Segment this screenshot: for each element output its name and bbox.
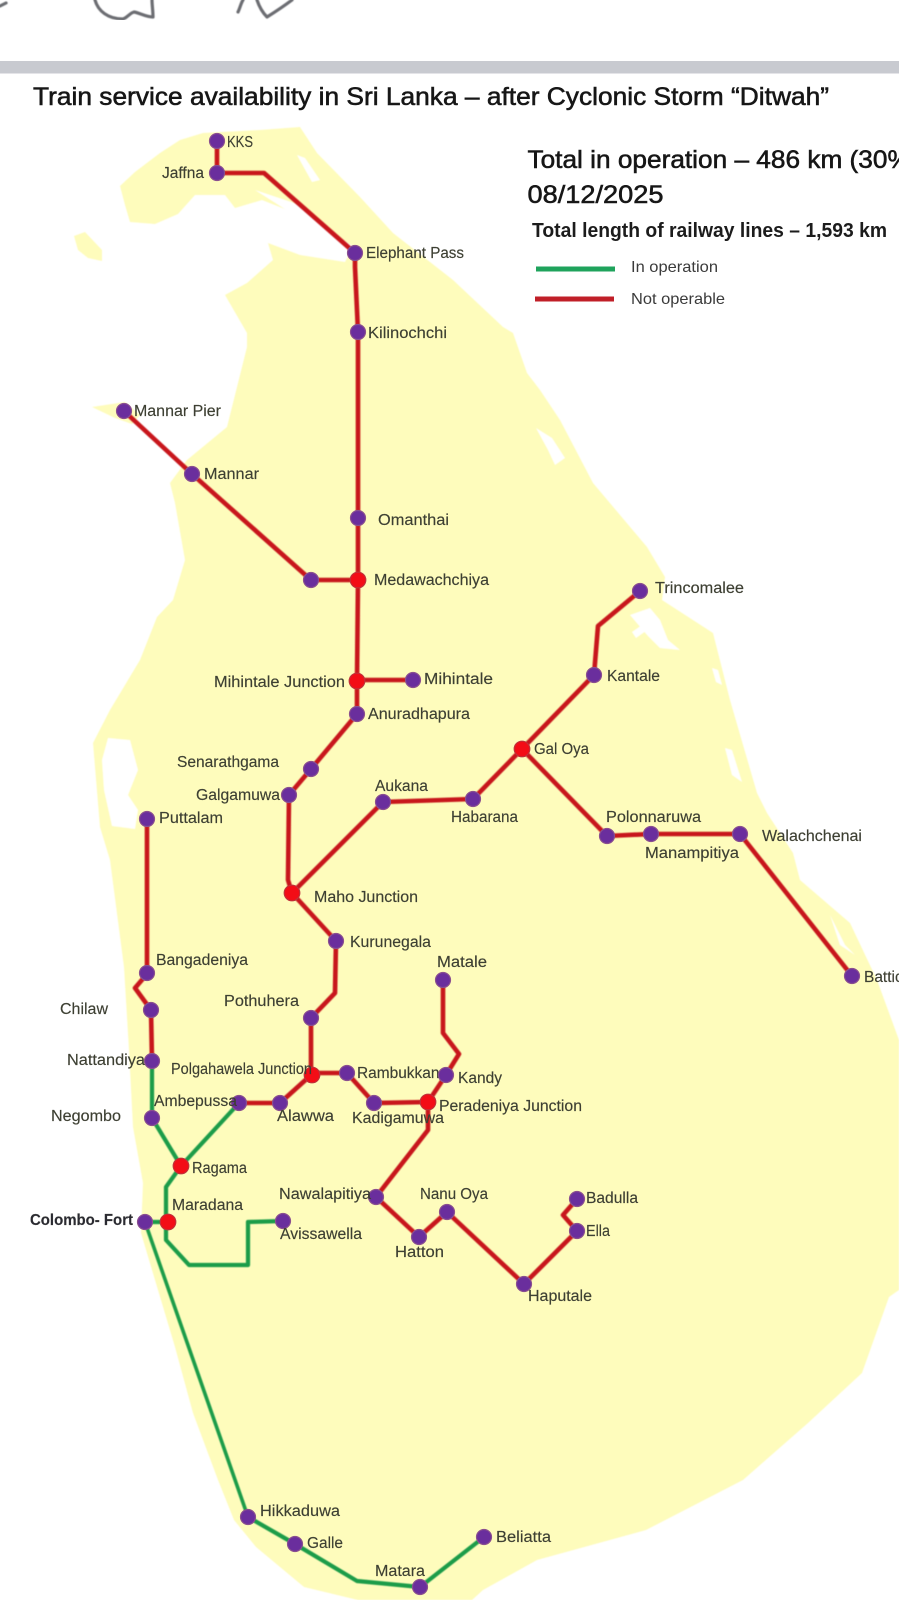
station: Manampitiya: Manampitiya bbox=[645, 845, 739, 862]
station: Matale: Matale bbox=[437, 954, 487, 971]
legend: in operation bbox=[536, 259, 718, 276]
station: Aukana: Aukana bbox=[375, 778, 428, 795]
station: Beliatta bbox=[476, 1529, 551, 1546]
station: Maradana bbox=[160, 1197, 243, 1230]
station: Avissawella: Avissawella bbox=[280, 1226, 362, 1243]
station: Galgamuwa: Galgamuwa bbox=[196, 787, 280, 804]
station: Mannar Pier: Mannar Pier bbox=[134, 403, 221, 420]
station: Matale bbox=[436, 954, 487, 988]
station: Chilaw: Chilaw bbox=[60, 1001, 109, 1018]
station: Hikkaduwa: Hikkaduwa bbox=[260, 1503, 340, 1520]
station: Elephant Pass: Elephant Pass bbox=[366, 245, 464, 262]
station: Habarana bbox=[451, 792, 518, 826]
station: Polonnaruwa: Polonnaruwa bbox=[606, 809, 701, 826]
station: Medawachchiya: Medawachchiya bbox=[374, 572, 489, 589]
station: Maradana: Maradana bbox=[172, 1197, 243, 1214]
station: Rambukkana: Rambukkana bbox=[357, 1065, 448, 1082]
station: Ambepussa: Ambepussa bbox=[154, 1093, 237, 1110]
station: Alawwa bbox=[272, 1096, 334, 1125]
cropped sketch icons at top bbox=[0, 0, 292, 19]
Mannar island bbox=[92, 402, 140, 424]
station: Kadigamuwa bbox=[352, 1096, 444, 1127]
station: Ragama bbox=[173, 1158, 247, 1177]
station: Badulla: Badulla bbox=[586, 1190, 638, 1207]
summary: total in operation: Total in operation – 486 km (30%) bbox=[528, 146, 899, 174]
station: Jaffna: Jaffna bbox=[162, 165, 204, 182]
station: Jaffna bbox=[162, 165, 224, 182]
station: Aukana bbox=[375, 778, 428, 810]
station: Chilaw bbox=[60, 1001, 158, 1018]
legend bbox=[535, 259, 725, 308]
station: Ella: Ella bbox=[586, 1223, 610, 1240]
station: Manampitiya bbox=[644, 826, 739, 862]
title: Train service availability in Sri Lanka – after Cyclonic Storm “Ditwah” bbox=[33, 83, 829, 111]
station: KKS bbox=[210, 134, 253, 151]
summary: total length: Total length of railway lines – 1,593 km bbox=[532, 220, 887, 242]
station: Kurunegala: Kurunegala bbox=[350, 934, 431, 951]
station: Kandy bbox=[438, 1068, 502, 1087]
station: Maho Junction: Maho Junction bbox=[314, 889, 418, 906]
station: Ragama: Ragama bbox=[192, 1160, 247, 1177]
station: Gal Oya: Gal Oya bbox=[534, 741, 589, 758]
station: Omanthai bbox=[350, 510, 449, 529]
railway lines: in operation bbox=[145, 1061, 484, 1587]
station: Omanthai: Omanthai bbox=[378, 512, 449, 529]
station: Kadigamuwa: Kadigamuwa bbox=[352, 1110, 444, 1127]
station: unnamed bbox=[304, 572, 318, 588]
station: Pothuhera: Pothuhera bbox=[224, 993, 299, 1010]
legend: not operable bbox=[535, 291, 725, 308]
station: Trincomalee: Trincomalee bbox=[655, 580, 744, 597]
station: Pothuhera bbox=[224, 993, 318, 1026]
station: Polgahawela Junction: Polgahawela Junction bbox=[171, 1061, 312, 1078]
station: Batticaloa bbox=[844, 968, 899, 986]
station: Kantale bbox=[586, 668, 660, 685]
station: Nanu Oya: Nanu Oya bbox=[420, 1186, 488, 1203]
station: Colombo Fort: Colombo- Fort bbox=[30, 1212, 133, 1229]
station: Anuradhapura: Anuradhapura bbox=[368, 706, 470, 723]
legend: not operable: Not operable bbox=[631, 291, 725, 308]
station: Haputale bbox=[516, 1276, 592, 1305]
station: Habarana: Habarana bbox=[451, 809, 518, 826]
station: Beliatta: Beliatta bbox=[496, 1529, 551, 1546]
station: Bangadeniya: Bangadeniya bbox=[156, 952, 248, 969]
Delft island bbox=[74, 232, 102, 261]
station: Peradeniya Junction: Peradeniya Junction bbox=[439, 1098, 582, 1115]
Jaffna and Trincomalee lagoons bbox=[255, 155, 855, 955]
station: Mannar: Mannar bbox=[204, 466, 259, 483]
station: Kandy: Kandy bbox=[458, 1070, 502, 1087]
station: Negombo bbox=[51, 1108, 160, 1126]
Puttalam lagoon bbox=[102, 738, 138, 829]
station: Nanu Oya bbox=[420, 1186, 488, 1220]
station: Haputale: Haputale bbox=[528, 1288, 592, 1305]
grey header band bbox=[0, 61, 899, 74]
station: Alawwa: Alawwa bbox=[277, 1108, 334, 1125]
station: Walachchenai: Walachchenai bbox=[762, 828, 862, 845]
station: Matara: Matara bbox=[375, 1563, 425, 1580]
station: Senarathgama bbox=[177, 754, 318, 776]
station: Nattandiya: Nattandiya bbox=[67, 1052, 145, 1069]
station: Polonnaruwa bbox=[600, 809, 701, 844]
station: Trincomalee bbox=[632, 580, 744, 598]
legend: in operation: In operation bbox=[631, 259, 718, 276]
station: Ella bbox=[570, 1223, 610, 1240]
station: Mihintale Junction: Mihintale Junction bbox=[214, 674, 345, 691]
station: Matara bbox=[375, 1563, 428, 1594]
station: Galle: Galle bbox=[307, 1535, 343, 1552]
station: Maho Junction bbox=[284, 885, 418, 906]
station: Walachchenai bbox=[732, 826, 862, 845]
station: Negombo: Negombo bbox=[51, 1108, 121, 1125]
station: Nawalapitiya: Nawalapitiya bbox=[279, 1186, 371, 1203]
summary: date: 08/12/2025 bbox=[528, 181, 664, 209]
station: Senarathgama: Senarathgama bbox=[177, 754, 279, 771]
station: KKS: KKS bbox=[227, 134, 253, 151]
station: Hikkaduwa bbox=[240, 1503, 340, 1524]
station: Kantale: Kantale bbox=[607, 668, 660, 685]
station: Avissawella bbox=[276, 1214, 362, 1243]
station: Hatton bbox=[395, 1230, 444, 1261]
station: Puttalam: Puttalam bbox=[159, 810, 223, 827]
station: Bangadeniya bbox=[140, 952, 248, 980]
railway lines: not operable bbox=[124, 141, 852, 1284]
station: Kilinochchi: Kilinochchi bbox=[368, 325, 447, 342]
station: Hatton: Hatton bbox=[395, 1244, 444, 1261]
station: Mihintale: Mihintale bbox=[424, 671, 493, 688]
station: Galle bbox=[288, 1535, 343, 1552]
